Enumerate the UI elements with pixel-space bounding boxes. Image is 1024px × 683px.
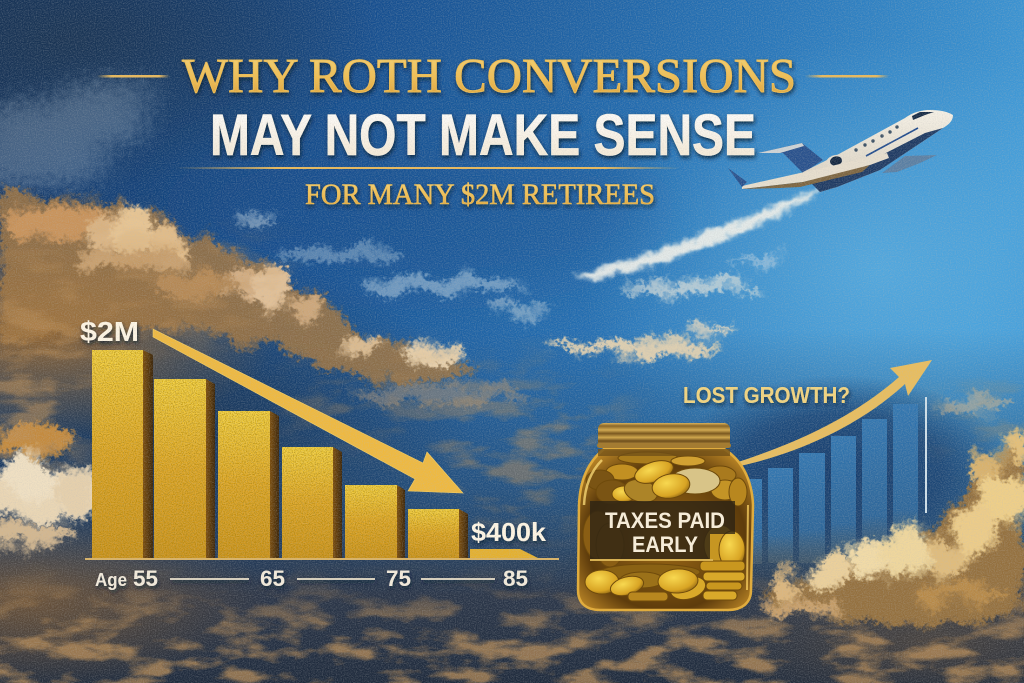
label: lost growth: LOST GROWTH? (683, 382, 850, 408)
winglet (728, 168, 747, 187)
label: $400k: $400k (471, 517, 547, 547)
subtitle: FOR MANY $2M RETIREES (305, 178, 655, 211)
jar label band (590, 501, 735, 561)
bar 6 (408, 509, 468, 558)
down arrow (153, 329, 463, 493)
icon: coin jar (578, 423, 753, 610)
title line 2: may not make sense: MAY NOT MAKE SENSE (210, 103, 756, 168)
bar 3 (218, 411, 279, 558)
cloud: bottom-left cream (0, 454, 125, 546)
coins bottom (583, 511, 745, 603)
age axis labels: 75 (386, 566, 411, 591)
left chart: declining balance (80, 316, 559, 591)
jet contrail (572, 190, 818, 280)
age axis labels (95, 566, 528, 591)
cabin windows (854, 125, 899, 152)
bar 5 (345, 485, 405, 558)
engine (825, 153, 847, 169)
age axis labels: Age (95, 570, 127, 590)
jar lid (597, 423, 731, 448)
title line 1: why roth conversions: WHY ROTH CONVERSIONS (182, 48, 796, 103)
jar label band: EARLY (632, 532, 698, 557)
age axis labels: 85 (503, 566, 528, 591)
cockpit window (912, 112, 934, 120)
right chart: lost growth (683, 360, 932, 564)
title block (97, 48, 889, 211)
title ornament right (805, 75, 889, 78)
jar highlights (584, 460, 602, 505)
age axis labels: 65 (260, 566, 285, 591)
main wing (742, 153, 889, 189)
label: $2M: $2M (80, 316, 139, 347)
jar glass body (578, 449, 753, 610)
clouds: upper left grey haze (0, 83, 160, 187)
up arrow (738, 360, 932, 466)
bar 7 age 85 (470, 549, 538, 558)
icon: private jet (728, 110, 953, 192)
age axis labels: 55 (133, 566, 158, 591)
title divider (175, 167, 680, 169)
clouds: bottom-right golden bank (760, 436, 1024, 624)
title ornament left (97, 75, 170, 78)
cheatline (866, 128, 918, 156)
clouds: left diagonal golden bank (0, 188, 480, 460)
clouds: centre wisps (238, 213, 1020, 413)
axis line (85, 558, 559, 560)
coins top (586, 452, 747, 506)
fuselage (803, 110, 953, 192)
far wing (882, 155, 937, 173)
speckled tan texture: bottom band and mottled mid areas (0, 231, 1024, 683)
tail fin (758, 143, 823, 173)
bar 2 (154, 379, 215, 558)
label text: taxes paid early: TAXES PAID (605, 508, 725, 533)
belly (812, 128, 943, 192)
bar 4 (282, 447, 342, 558)
faded blue bars (748, 479, 762, 564)
bar 1 age 55 (92, 350, 153, 558)
